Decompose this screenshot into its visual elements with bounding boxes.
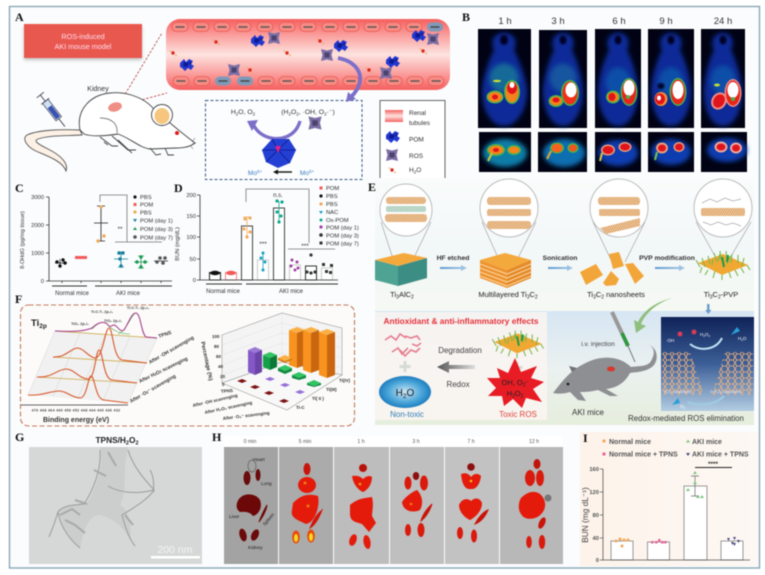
Mo redox labels: 6+: [257, 169, 262, 174]
scan 6 h axial: [595, 132, 641, 172]
y axis labels D: 50: [190, 257, 196, 263]
floor diamonds: [237, 377, 305, 403]
3D bar chart: [222, 313, 342, 410]
bars orange: [278, 327, 335, 378]
3D chart axis labels: After ·O₂⁻ scavenging: [223, 410, 270, 421]
x group labels C: Normal mice: [55, 291, 89, 297]
AKI mouse: [553, 345, 657, 401]
scan 24 h whole body: [701, 29, 745, 128]
legend C: PBS: [140, 195, 152, 201]
material labels: 2: [601, 294, 604, 300]
reaction products text: H: [231, 109, 236, 116]
water oval: 2: [403, 393, 407, 400]
y axis title C: 8-OHdG (pg/mg tissue): [20, 211, 26, 269]
3D chart axis labels: 60: [216, 354, 222, 359]
non-toxic label: Non-toxic: [390, 410, 424, 419]
G title: O: [129, 435, 136, 445]
scan 9 h axial: [648, 132, 694, 172]
legend A: O: [416, 167, 421, 174]
organ panel 0 min: Liver: [229, 514, 240, 520]
step labels: [437, 255, 695, 262]
icon: syringe: [36, 92, 69, 130]
legend C: [133, 195, 173, 242]
reaction products text: 2: [253, 112, 256, 116]
time strip: 1 h: [357, 439, 365, 445]
legend A: [380, 100, 445, 179]
scale bar: 200 nm: [157, 544, 193, 556]
Kidney label: Kidney: [87, 86, 109, 93]
green arrow: [634, 298, 672, 333]
plus left: [400, 361, 410, 372]
legend A: ROS: [409, 153, 424, 160]
y axis labels D: [186, 193, 196, 284]
legend I: Normal mice + TPNS: [609, 452, 678, 458]
time labels: 6 h: [612, 16, 626, 27]
time strip: 5 min: [299, 439, 311, 445]
scan 24 h axial: [701, 132, 747, 172]
legend D: POM (day 3): [326, 234, 359, 240]
reactive species text: 2: [296, 112, 299, 116]
y ticks I: 0: [596, 558, 599, 564]
reactive species text: 2: [324, 112, 327, 116]
dashed border F: [20, 305, 354, 426]
effects box: [375, 312, 547, 420]
flake on right: [492, 331, 544, 358]
y axis labels D: 150: [186, 214, 196, 220]
scale bar: [151, 544, 200, 558]
ROS burst: O: [515, 389, 521, 398]
y ticks I: 160: [589, 467, 599, 473]
nanosheet fragments: [580, 252, 644, 286]
organ panel 1 h: [334, 447, 389, 564]
y axis labels D: 0: [193, 278, 196, 284]
material labels: 2: [411, 294, 414, 300]
time strip: [224, 436, 563, 447]
x labels D: AKI mice: [279, 289, 304, 295]
organ panel 0 min: Kidney: [248, 545, 263, 551]
down arrow: [705, 304, 712, 314]
injection label: i.v. injection: [581, 341, 615, 348]
water oval: O: [407, 388, 415, 399]
y title I: BUN (mg dL⁻¹): [580, 487, 590, 543]
panel letter H: H: [212, 430, 222, 444]
reactive species text: O: [291, 109, 296, 116]
axes C: [46, 197, 172, 286]
material labels: Ti: [704, 290, 710, 299]
ROS burst: [487, 358, 544, 408]
peak labels: Ti-C-Tₓ 2p₃/₂: [127, 306, 149, 310]
legend D: Ox-POM: [326, 218, 349, 224]
significance brackets D: [246, 189, 335, 250]
y axis labels C: 1000: [31, 251, 44, 257]
3D chart axis labels: Ti( II ): [312, 396, 324, 401]
scatter points C: [55, 205, 168, 269]
Mo redox labels: 5+: [309, 169, 314, 174]
peak labels: Ti-C-Tₓ 2p₁/₂: [91, 310, 113, 314]
legend D: POM: [326, 186, 339, 192]
x labels D: Normal mice: [206, 289, 240, 295]
material labels: C: [596, 290, 602, 299]
degraded fragments: [385, 334, 421, 356]
panel I: BUN bar chart: [580, 431, 758, 566]
organ panel 0 min: [224, 447, 278, 564]
bars D: [210, 208, 332, 280]
3D chart axis labels: Percentage (%): [199, 341, 213, 381]
scan 3 h whole body: [539, 30, 587, 128]
panel G: TEM image: [15, 430, 202, 564]
panel E: Ti3C2-PVP synthesis and ROS elimination: [368, 178, 754, 425]
lower band background: [375, 311, 754, 425]
panel letter I: I: [583, 431, 588, 445]
bars I: [611, 486, 743, 560]
3D chart axis labels: Ti(III): [326, 387, 337, 392]
organ panel 0 min: Spleen: [262, 512, 276, 527]
legend C: POM (day 1): [140, 218, 173, 224]
y ticks I: 120: [589, 490, 599, 496]
ROS burst: H: [507, 389, 512, 398]
scan 9 h whole body: [648, 29, 694, 128]
reactive species text: 2: [288, 112, 291, 116]
ROS elimination panel: 2: [684, 406, 686, 410]
3D chart axis labels: 0: [222, 382, 225, 387]
energy axis title: Binding energy (eV): [43, 417, 109, 424]
legend C: POM: [140, 202, 153, 208]
material labels: 3: [527, 294, 530, 300]
redox label: Redox: [446, 380, 470, 389]
Ti2p heading: Ti: [31, 318, 39, 329]
panel letter E: E: [368, 180, 376, 194]
significance brackets D: ***: [259, 241, 267, 248]
time strip: 0 min: [244, 439, 256, 445]
mouse illustration: [25, 93, 196, 171]
organ panel 3 h: [390, 447, 444, 564]
x labels D: [206, 289, 304, 295]
y axis labels C: 2000: [31, 223, 44, 229]
significance brackets D: n.s.: [273, 193, 283, 199]
syringe E: [612, 312, 635, 362]
y ticks I: 40: [593, 536, 599, 542]
time strip: 3 h: [412, 439, 420, 445]
data points D: [210, 199, 333, 275]
magnifier 2: [480, 179, 538, 262]
significance brackets D: ***: [301, 243, 309, 250]
legend D: PBS: [326, 194, 338, 200]
3D chart axis labels: [192, 334, 351, 421]
time strip: 7 h: [467, 439, 475, 445]
material labels: 3: [710, 294, 713, 300]
ROS elimination panel: O: [705, 332, 709, 337]
legend D: POM (day 1): [326, 226, 359, 232]
legend I: AKI mice + TPNS: [692, 452, 749, 458]
icon: large POM: [262, 139, 296, 168]
y ticks I: 80: [593, 513, 599, 519]
block Ti3AlC2: [375, 253, 427, 286]
bars green: [263, 352, 321, 387]
reaction products text: O, O: [238, 109, 253, 116]
ROS elimination panel: O: [743, 336, 747, 341]
material labels: 2: [718, 294, 721, 300]
Mo redox labels: Mo: [248, 170, 257, 177]
mechanism inset box: [206, 100, 362, 180]
reactive species text: ·⁻): [327, 109, 335, 116]
spectra labels: After H2O2 scavenging: [138, 356, 189, 385]
material labels: nanosheets: [604, 290, 645, 299]
material labels: 2: [535, 294, 538, 300]
legend A: POM: [409, 136, 424, 144]
water oval: [379, 376, 431, 408]
legend C: POM (day 3): [140, 227, 173, 233]
reaction products text: 2: [236, 112, 239, 116]
water oval: H: [396, 388, 403, 399]
panel A: ROS-induced AKI mouse model: [15, 10, 450, 180]
legend A: Renal: [409, 110, 427, 117]
x group labels C: [55, 291, 141, 297]
PVP flake: [696, 251, 750, 280]
organ panel 5 min: [279, 447, 333, 564]
3D chart axis labels: 80: [214, 344, 220, 349]
ROS elimination panel: [661, 317, 754, 411]
3D chart axis labels: TPNS: [221, 388, 233, 394]
TEM micrograph: [29, 447, 202, 564]
panel C: 8-OHdG scatter: [15, 181, 173, 297]
material labels: Ti: [587, 290, 593, 299]
3D chart axis labels: 100: [212, 334, 220, 339]
legend I: AKI mice: [692, 439, 722, 446]
zoom leader lines: [121, 33, 167, 105]
panel letter D: D: [174, 181, 183, 195]
peak labels: TiO₂ 2p₁/₂: [71, 322, 89, 326]
model title box: ROS-induced: [61, 32, 105, 41]
icon: ROS in inset: [308, 116, 322, 130]
ROS burst: 2: [512, 394, 515, 400]
panel E background: [375, 178, 754, 311]
time labels: 24 h: [714, 16, 732, 27]
material labels: Ti: [390, 290, 396, 299]
panel letter B: B: [462, 10, 470, 24]
legend D: [319, 186, 359, 248]
ROS elimination panel: 2: [741, 338, 743, 342]
material labels: [390, 290, 738, 300]
3D chart axis labels: After ·OH scavenging: [192, 393, 238, 408]
y ticks I: [589, 467, 599, 564]
panel letter C: C: [15, 181, 24, 195]
material labels: C: [529, 290, 535, 299]
legend A: H: [409, 167, 414, 174]
organ panel 12 h: [500, 447, 563, 564]
degradation label: Degradation: [438, 346, 482, 355]
panel B: PET scans: [462, 10, 747, 172]
axes D: [197, 195, 338, 284]
significance bracket C: **: [117, 226, 123, 233]
material labels: 3: [593, 294, 596, 300]
process arrows: [440, 265, 685, 271]
step labels: PVP modification: [639, 255, 695, 262]
significance I: ****: [708, 461, 719, 468]
effects title: Antioxidant & anti-inflammatory effects: [384, 316, 539, 326]
organ panel 0 min: Lung: [261, 481, 272, 487]
legend I: Normal mice: [609, 439, 651, 446]
G title: 2: [135, 440, 139, 446]
legend A: 2: [414, 170, 417, 174]
renal tubule: [166, 19, 450, 90]
model title box: [24, 24, 142, 60]
XPS ridgeline chart: [21, 313, 157, 405]
panel H: organ imaging: [212, 430, 563, 564]
panel letter G: G: [15, 430, 24, 444]
ROS elimination caption: Redox-mediated ROS elimination: [628, 414, 744, 423]
ROS elimination panel: 2: [708, 334, 710, 338]
legend C: POM (day 7): [140, 236, 173, 242]
scan 3 h axial: [538, 132, 587, 172]
magnifier 3: [590, 179, 648, 262]
scan 1 h whole body: [478, 29, 531, 128]
toxic ROS label: Toxic ROS: [499, 410, 537, 419]
material labels: AlC: [399, 290, 412, 299]
ROS elimination panel: 2: [703, 334, 705, 338]
legend C: PBS: [140, 210, 152, 216]
legend A: tubules: [409, 120, 431, 127]
plus right: [512, 362, 522, 373]
ROS elimination panel: H: [700, 332, 703, 337]
spectra labels: TPNS: [158, 330, 173, 340]
significance bracket C: [100, 195, 162, 242]
step labels: HF etched: [437, 255, 469, 262]
ROS elimination panel: O: [680, 404, 684, 409]
gray arrow: [437, 361, 475, 373]
arrow: tubule to inset: [338, 58, 360, 102]
significance I: [695, 461, 732, 468]
panel letter F: F: [15, 292, 22, 306]
x group labels C: AKI mice: [116, 291, 141, 297]
time labels: 3 h: [551, 16, 565, 27]
y axis labels C: [31, 195, 44, 285]
Mo redox labels: Mo: [300, 170, 309, 177]
Ti2p heading: 2p: [39, 323, 47, 330]
y axis labels C: 3000: [31, 195, 44, 201]
step labels: Sonication: [543, 255, 577, 262]
panel D: BUN bar chart: [174, 181, 359, 295]
ROS burst: 2: [523, 382, 526, 388]
legend D: POM (day 7): [326, 242, 359, 248]
block multilayered: [480, 253, 531, 288]
3D chart axis labels: After H₂O₂ scavenging: [204, 400, 253, 415]
material labels: C: [713, 290, 719, 299]
y axis labels D: 200: [186, 193, 196, 199]
magnifier 4: [694, 179, 752, 258]
legend I: [602, 439, 749, 458]
arrow: catalytic arc: [247, 120, 300, 139]
G title: TPNS/H: [95, 435, 126, 445]
legend D: NAC: [326, 210, 338, 216]
y axis title D: BUN (mg/dL): [175, 227, 181, 261]
spectra labels: After ·OH scavenging: [148, 335, 195, 366]
data points I: [614, 471, 740, 548]
spectra labels: [129, 330, 195, 405]
3D chart axis labels: 40: [218, 364, 224, 369]
energy axis ticks: 476 468 464 460 456 452 448 444 440 436 432: [32, 408, 120, 412]
material labels: 3: [396, 294, 399, 300]
time strip: 12 h: [529, 439, 539, 445]
ROS burst: −: [526, 380, 529, 386]
model title box: AKI mouse model: [55, 42, 112, 51]
legend D: PBS: [326, 202, 338, 208]
3D chart axis labels: Ti(IV): [339, 378, 351, 383]
time labels: 9 h: [659, 16, 673, 27]
AKI mice label: AKI mice: [572, 408, 605, 417]
reactive species text: , ·OH, O: [299, 109, 324, 116]
Mo redox labels: [248, 169, 314, 177]
3D chart axis labels: Ti-C: [296, 405, 305, 410]
material labels: Multilayered Ti: [478, 290, 527, 299]
y axis labels C: 0: [41, 279, 44, 285]
organ panel 0 min: Heart: [253, 457, 265, 463]
ROS elimination panel: Ti₃C₂ nanosheets: [664, 390, 691, 394]
3D chart axis labels: 20: [220, 374, 226, 379]
peak labels: TiO₂ 2p₃/₂: [104, 319, 122, 323]
ROS elimination panel: ·OH: [666, 338, 674, 343]
panel letter A: A: [15, 10, 24, 24]
bar purple: [248, 347, 262, 375]
ROS burst: OH, O: [502, 378, 523, 387]
time labels: 1 h: [498, 16, 512, 27]
spectra labels: After ·O2⁻ scavenging: [129, 373, 177, 405]
G title: 2: [126, 440, 129, 446]
organ panel 7 h: [445, 447, 499, 564]
material labels: -PVP: [721, 290, 738, 299]
ROS burst: 2: [521, 394, 524, 400]
time labels: [498, 16, 732, 27]
ROS elimination panel: O-Ti₃C₂ nanosheets: [710, 390, 741, 394]
reactive species text: (H: [281, 109, 288, 116]
ROS elimination panel: H: [738, 336, 741, 341]
y axis labels D: 100: [186, 235, 196, 241]
axes I: [600, 469, 750, 560]
scan 1 h axial: [479, 132, 531, 172]
peak labels: [71, 306, 149, 326]
panel F: XPS and 3D bar chart: [15, 292, 354, 426]
magnifier 1: [380, 184, 432, 268]
scan 6 h whole body: [595, 29, 641, 128]
panel background I: [580, 432, 758, 566]
